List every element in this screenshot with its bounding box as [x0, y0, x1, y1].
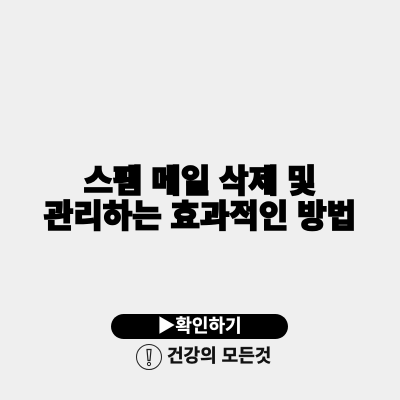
title line 1: 스팸 메일 삭제 및: [84, 163, 316, 199]
icon: exclamation circle: [136, 344, 162, 370]
button: confirm: ▶확인하기: [157, 316, 242, 336]
button: confirm: [111, 314, 288, 339]
brand label: 건강의 모든것: [167, 346, 271, 366]
title: [44, 163, 356, 234]
title line 2: 관리하는 효과적인 방법: [44, 198, 356, 234]
